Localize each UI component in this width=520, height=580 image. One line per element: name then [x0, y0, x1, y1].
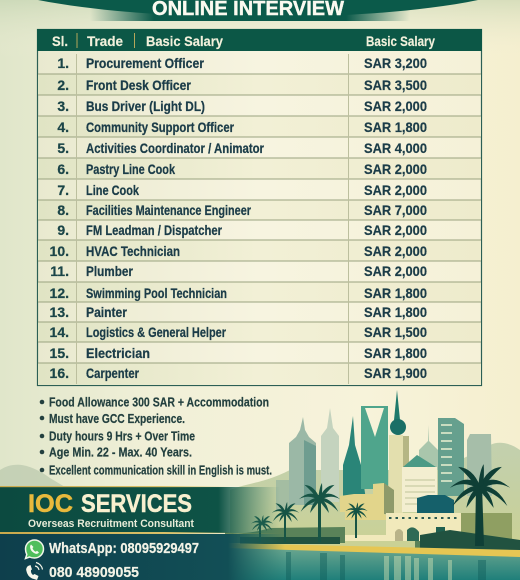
serial numbers: 10. — [50, 243, 69, 259]
serial numbers: 3. — [57, 98, 69, 114]
footer band: company branding: SERVICES — [81, 490, 192, 518]
trade names: Community Support Officer — [86, 120, 235, 135]
requirements list: Food Allowance 300 SAR + Accommodation — [49, 396, 269, 410]
salaries — [364, 55, 427, 381]
serial numbers: 8. — [57, 202, 69, 218]
kingdom centre tower — [361, 406, 388, 489]
salaries: SAR 4,000 — [364, 140, 427, 156]
trade names — [86, 56, 265, 381]
heading ribbon: online interview — [38, 0, 478, 21]
footer band: company branding — [0, 486, 285, 580]
serial numbers: 14. — [50, 324, 69, 340]
salaries: SAR 2,000 — [364, 161, 427, 177]
trade names: Logistics & General Helper — [86, 325, 227, 340]
sand strip — [225, 543, 520, 558]
requirements list: Age Min. 22 - Max. 40 Years. — [49, 446, 192, 460]
salaries: SAR 7,000 — [364, 202, 427, 218]
table header: Basic Salary — [366, 33, 435, 49]
right-hand hill block — [452, 513, 512, 545]
serial numbers: 5. — [57, 140, 69, 156]
trade names: Swimming Pool Technician — [86, 286, 227, 301]
striped building — [402, 455, 437, 512]
trade names: Procurement Officer — [86, 56, 205, 71]
trade names: Front Desk Officer — [86, 78, 192, 93]
serial numbers: 7. — [57, 182, 69, 198]
salaries: SAR 2,000 — [364, 222, 427, 238]
serial numbers: 2. — [57, 77, 69, 93]
table header: Trade — [87, 33, 123, 49]
salaries: SAR 2,000 — [364, 182, 427, 198]
requirements list: Duty hours 9 Hrs + Over Time — [49, 430, 195, 444]
serial numbers: 9. — [57, 222, 69, 238]
trade names: Line Cook — [86, 183, 139, 198]
salaries: SAR 2,000 — [364, 243, 427, 259]
serial numbers: 6. — [57, 161, 69, 177]
salaries: SAR 1,900 — [364, 365, 427, 381]
company name: IOC — [28, 490, 73, 518]
city skyline illustration — [225, 390, 520, 580]
table header: Sl. — [52, 33, 68, 49]
table header — [37, 29, 482, 51]
trade names: Activities Coordinator / Animator — [86, 141, 265, 156]
serial numbers: 12. — [50, 285, 69, 301]
serial numbers: 11. — [50, 263, 69, 279]
dome tower behind — [419, 425, 438, 470]
palm trees — [251, 464, 510, 546]
salary table — [37, 29, 482, 386]
salaries: SAR 1,800 — [364, 119, 427, 135]
trade names: FM Leadman / Dispatcher — [86, 223, 223, 238]
serial numbers — [50, 55, 69, 381]
background hills — [0, 443, 520, 550]
icon: whatsapp — [26, 540, 43, 558]
requirements list — [40, 396, 272, 478]
table row stripes — [38, 74, 481, 385]
salaries: SAR 1,800 — [364, 304, 427, 320]
serial numbers: 15. — [50, 345, 69, 361]
requirements list: Must have GCC Experience. — [49, 412, 185, 426]
salaries: SAR 2,000 — [364, 263, 427, 279]
distant towers — [276, 408, 492, 510]
salaries: SAR 1,800 — [364, 285, 427, 301]
trade names: Pastry Line Cook — [86, 162, 175, 177]
salaries: SAR 3,200 — [364, 55, 427, 71]
serial numbers: 1. — [57, 55, 69, 71]
table header: Basic Salary — [146, 33, 223, 49]
trade names: Painter — [86, 305, 128, 320]
shoreline ground — [225, 527, 520, 552]
minaret tower — [389, 390, 409, 513]
serial numbers: 13. — [50, 304, 69, 320]
tagline: Overseas Recruitment Consultant — [28, 518, 194, 530]
whatsapp number: WhatsApp: 08095929497 — [49, 541, 199, 557]
salaries: SAR 1,500 — [364, 324, 427, 340]
trade names: HVAC Technician — [86, 244, 180, 259]
icon: phone — [26, 562, 42, 580]
low city blocks — [340, 483, 394, 520]
requirements list: Excellent communication skill in English is must. — [49, 464, 272, 478]
trade names: Electrician — [86, 346, 150, 361]
trade names: Facilities Maintenance Engineer — [86, 203, 252, 218]
serial numbers: 4. — [57, 119, 69, 135]
trade names: Carpenter — [86, 366, 140, 381]
salaries: SAR 2,000 — [364, 98, 427, 114]
salaries: SAR 1,800 — [364, 345, 427, 361]
salaries: SAR 3,500 — [364, 77, 427, 93]
water — [225, 548, 520, 580]
trade names: Plumber — [86, 264, 134, 279]
waterfront fort — [340, 495, 461, 541]
serial numbers: 16. — [50, 365, 69, 381]
trade names: Bus Driver (Light DL) — [86, 99, 205, 114]
